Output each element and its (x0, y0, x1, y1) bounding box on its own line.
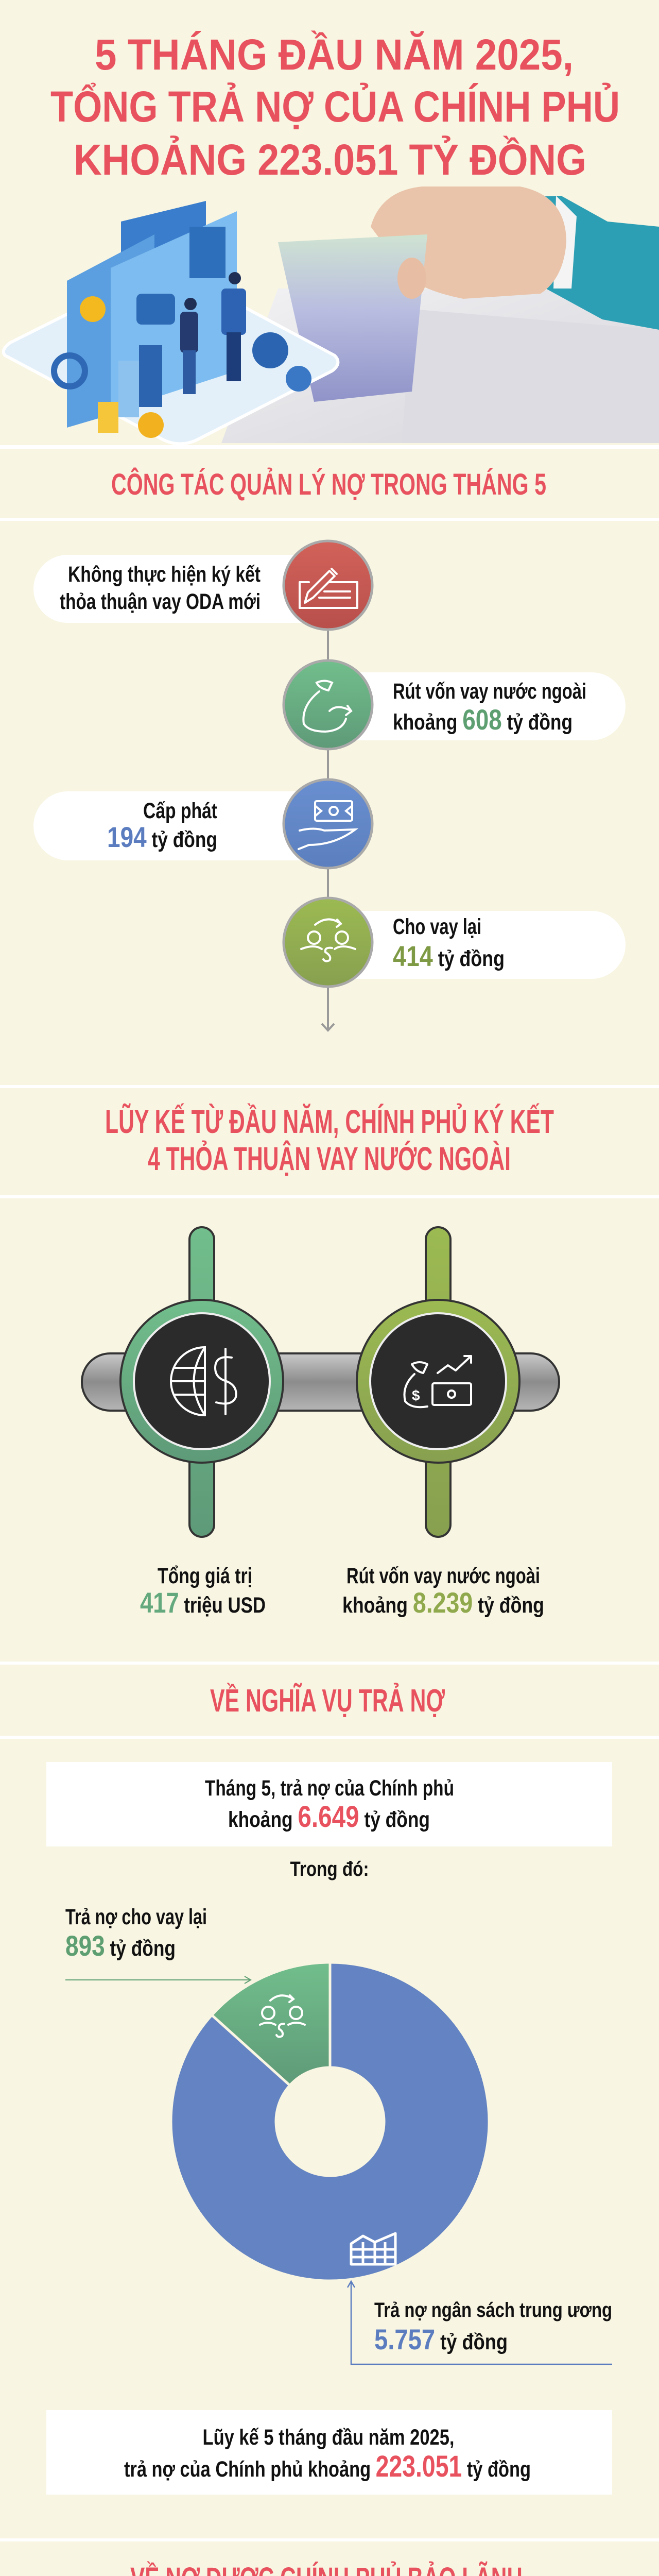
callout: cumulative repayment: trả nợ của Chính phủ khoảng 223.051 tỷ đồng (124, 2450, 531, 2483)
heading: section 2 (105, 1103, 554, 1177)
stat: total value: 417 triệu USD (140, 1586, 266, 1619)
label: on-lending repayment (65, 1905, 251, 1984)
person 2 (221, 272, 246, 381)
icon: globe dollar (171, 1347, 236, 1415)
stat: total value (140, 1564, 266, 1619)
icon: signing pen (300, 569, 357, 608)
callout: cumulative repayment: Lũy kế 5 tháng đầu năm 2025, (203, 2425, 454, 2450)
item 4: on-lending (284, 898, 626, 987)
title: 5 THÁNG ĐẦU NĂM 2025, (95, 30, 574, 79)
item 1: no ODA signing: Không thực hiện ký kết (68, 562, 261, 587)
item 3: allocation: Cấp phát (143, 799, 217, 823)
callout: May repayment: khoảng 6.649 tỷ đồng (228, 1800, 430, 1834)
item 4: on-lending: 414 tỷ đồng (393, 940, 505, 972)
donut chart (171, 1962, 489, 2281)
callout: cumulative repayment (46, 2410, 612, 2495)
item 4: on-lending: Cho vay lại (393, 914, 481, 939)
timeline connector with arrow (322, 629, 334, 1030)
stat: withdrawal: khoảng 8.239 tỷ đồng (342, 1586, 544, 1619)
item 2: foreign loan withdrawal: khoảng 608 tỷ đồng (393, 703, 573, 736)
item 3: allocation: 194 tỷ đồng (107, 821, 217, 853)
label: on-lending repayment: 893 tỷ đồng (65, 1929, 176, 1962)
node: withdrawal (357, 1300, 519, 1463)
item 2: foreign loan withdrawal: Rút vốn vay nước ngoài (393, 679, 586, 704)
stat: total value: Tổng giá trị (158, 1564, 252, 1588)
label: central budget repayment: Trả nợ ngân sách trung ương (374, 2299, 612, 2321)
label: central budget repayment: 5.757 tỷ đồng (374, 2323, 508, 2355)
item 3: allocation (33, 779, 372, 868)
item 1: no ODA signing (33, 541, 372, 630)
label: central budget repayment (348, 2281, 612, 2364)
item 2: foreign loan withdrawal (284, 660, 626, 749)
node: total value (120, 1300, 283, 1463)
text: trong do: Trong đó: (290, 1858, 369, 1880)
icon: people exchange (301, 919, 355, 961)
heading: section 3: VỀ NGHĨA VỤ TRẢ NỢ (210, 1683, 445, 1719)
icon: factory in slice (351, 2233, 395, 2264)
icon: money bag (303, 681, 351, 732)
icon: money bag with growth: $ (412, 1387, 420, 1403)
hero photo: hand with banknotes (221, 187, 659, 443)
stat: withdrawal: Rút vốn vay nước ngoài (346, 1564, 540, 1588)
person 1 (180, 298, 198, 394)
icon: money in hand (299, 801, 355, 849)
item 1: no ODA signing: thỏa thuận vay ODA mới (60, 589, 261, 614)
title: KHOẢNG 223.051 TỶ ĐỒNG (74, 135, 586, 184)
callout: May repayment (46, 1762, 612, 1846)
callout: May repayment: Tháng 5, trả nợ của Chính phủ (205, 1776, 454, 1801)
label: on-lending repayment: Trả nợ cho vay lại (65, 1905, 207, 1929)
connector diagram (82, 1227, 559, 1537)
title (50, 30, 620, 184)
icon: money bag with growth (404, 1356, 471, 1407)
hero illustration: business analytics (4, 201, 338, 444)
icon: exchange people in slice (260, 1995, 305, 2037)
stat: withdrawal (342, 1564, 544, 1619)
